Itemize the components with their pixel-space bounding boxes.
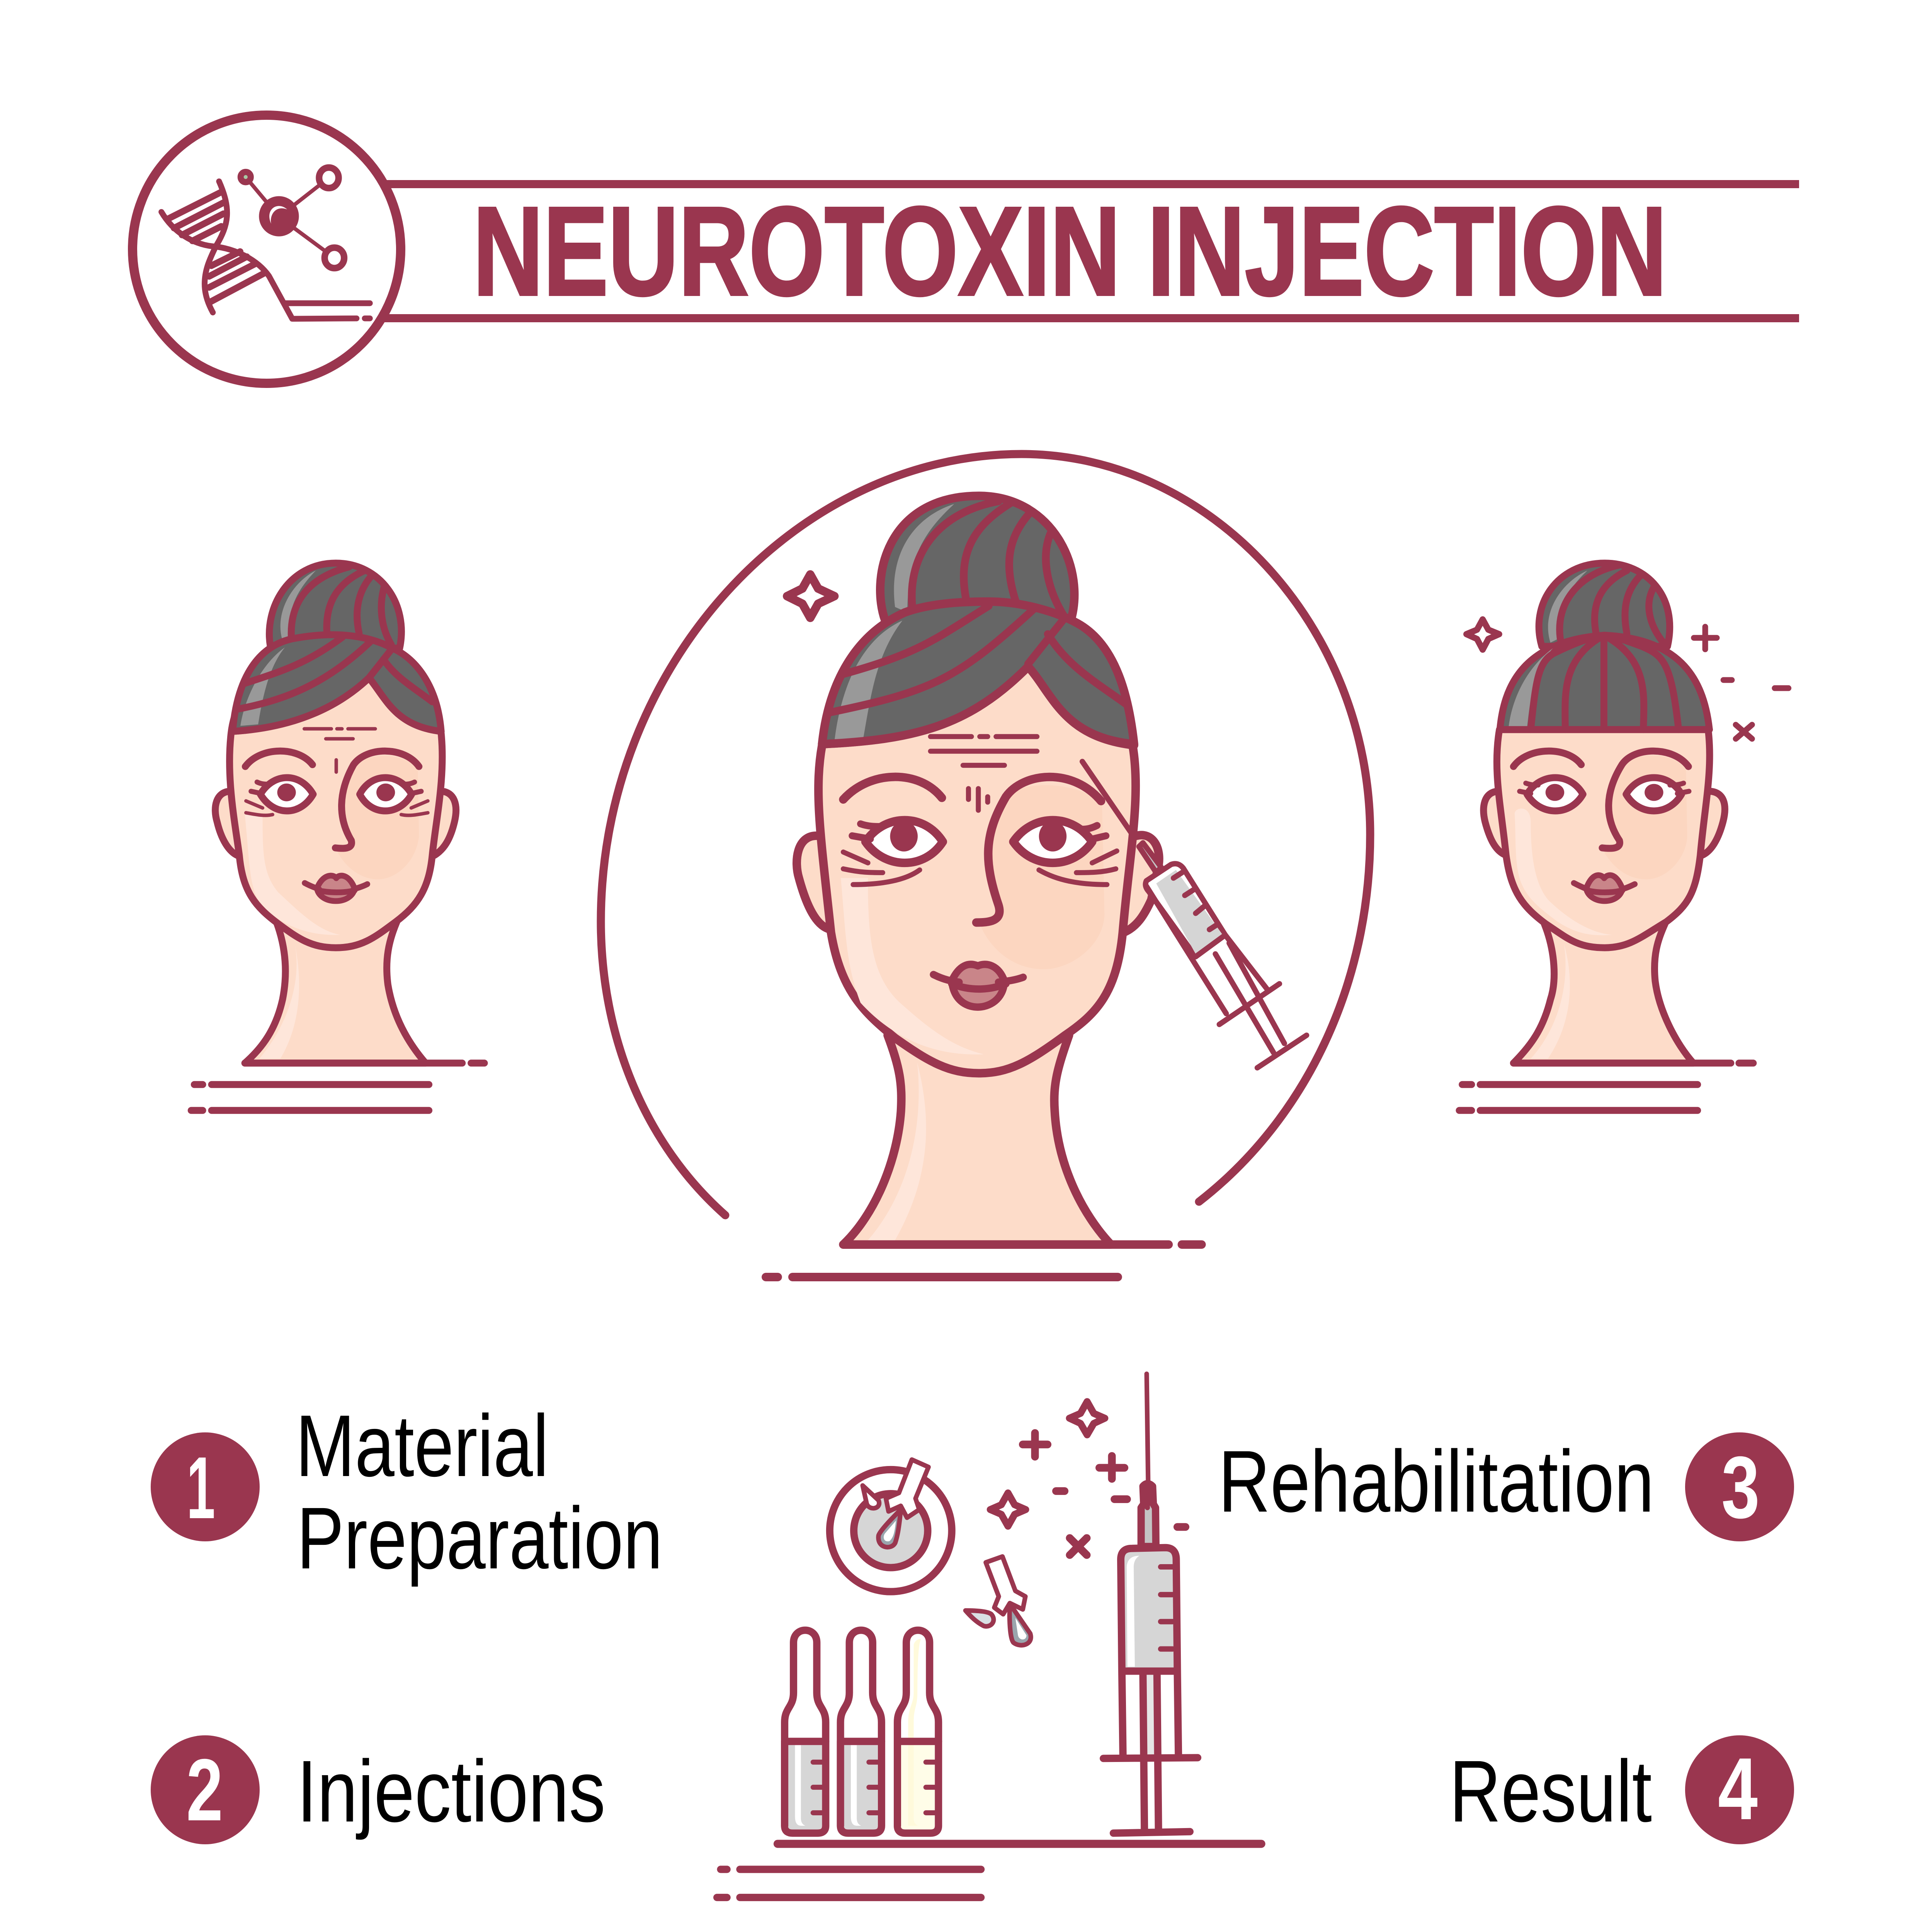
hair with fringe: [1500, 635, 1709, 730]
cheek highlight: [1515, 808, 1612, 935]
step 4 badge: [1685, 1735, 1794, 1844]
neck: [245, 922, 425, 1063]
step 1 badge: [151, 1432, 260, 1541]
illustration: ampoules and syringe: [717, 1374, 1261, 1898]
step 1 label: Preparation: [297, 1490, 663, 1587]
big arc around central figure: [601, 454, 1370, 1215]
cheek shadow: [1604, 755, 1687, 879]
face: [818, 612, 1136, 1073]
ground lines: [1459, 1063, 1753, 1111]
ground lines: [766, 1245, 1202, 1277]
ground lines: [777, 1840, 1261, 1848]
eyes: [866, 820, 1092, 863]
brows and nose: [843, 777, 1101, 922]
illustration: right woman (result): [1459, 563, 1789, 1111]
cheek highlight: [245, 815, 340, 935]
DNA helix: [162, 181, 370, 319]
ears: [797, 835, 1159, 932]
lower dashes: [717, 1869, 981, 1898]
falling ampoule pieces: [966, 1556, 1031, 1645]
fringe line: [1500, 726, 1709, 733]
header band: [348, 180, 1799, 322]
lashes: [852, 824, 1106, 839]
lips: [934, 964, 1023, 1007]
cheek highlight: [841, 878, 984, 1054]
step 2 badge: 2: [186, 1741, 223, 1839]
step 1 badge: 1: [187, 1439, 215, 1537]
brows and nose: [245, 751, 419, 849]
sparkle: [787, 575, 834, 618]
ears: [1483, 791, 1725, 855]
face: [1497, 730, 1710, 948]
large syringe: [1104, 1374, 1198, 1833]
eyes: [1527, 777, 1682, 811]
step 1 label: [296, 1397, 663, 1587]
step 2 badge: [151, 1735, 260, 1844]
illustration: left woman (before): [191, 563, 485, 1111]
lashes: [1520, 783, 1689, 794]
face: [230, 641, 442, 948]
neck: [843, 1035, 1111, 1245]
bun: [1539, 563, 1670, 646]
cheek shadow: [337, 756, 419, 879]
sparkle: [1466, 619, 1499, 650]
hair: [233, 635, 441, 731]
icon: DNA and molecule badge: [133, 115, 401, 383]
step 4 label: Result: [1449, 1743, 1652, 1840]
wrinkles: [246, 729, 428, 815]
plus and minus marks: [1694, 627, 1789, 739]
lashes: [251, 782, 421, 794]
neck: [1514, 923, 1693, 1063]
ampoule 3: [898, 1630, 939, 1833]
bun: [880, 496, 1074, 623]
step 3 badge: 3: [1721, 1439, 1760, 1537]
step 3 label: Rehabilitation: [1218, 1433, 1654, 1531]
neck highlight: [1531, 944, 1570, 1059]
eyes: [260, 777, 412, 811]
ampoule 1: [785, 1630, 826, 1833]
ground lines: [191, 1063, 485, 1111]
broken ampoule in bowl: [863, 1460, 929, 1547]
step 4 badge: 4: [1718, 1740, 1758, 1838]
neck highlight: [868, 1062, 926, 1240]
cheek shadow: [979, 785, 1104, 969]
ampoule 2: [840, 1630, 881, 1833]
molecule: [240, 168, 344, 268]
illustration: central woman (injection): [766, 496, 1306, 1277]
ears: [215, 791, 456, 855]
brows and nose: [1514, 751, 1689, 849]
wrinkles: [843, 736, 1117, 884]
bun: [269, 563, 401, 648]
hair: [822, 602, 1134, 745]
sparkles: [990, 1401, 1105, 1526]
step 2 label: Injections: [297, 1743, 605, 1840]
syringe: [1082, 762, 1306, 1068]
plus minus marks: [1023, 1433, 1185, 1555]
step 1 label: Material: [296, 1397, 549, 1495]
mixing bowl: [830, 1469, 952, 1592]
lips: [305, 876, 367, 901]
neck highlight: [259, 944, 299, 1059]
lips: [1574, 875, 1635, 901]
step 3 badge: [1685, 1432, 1794, 1541]
